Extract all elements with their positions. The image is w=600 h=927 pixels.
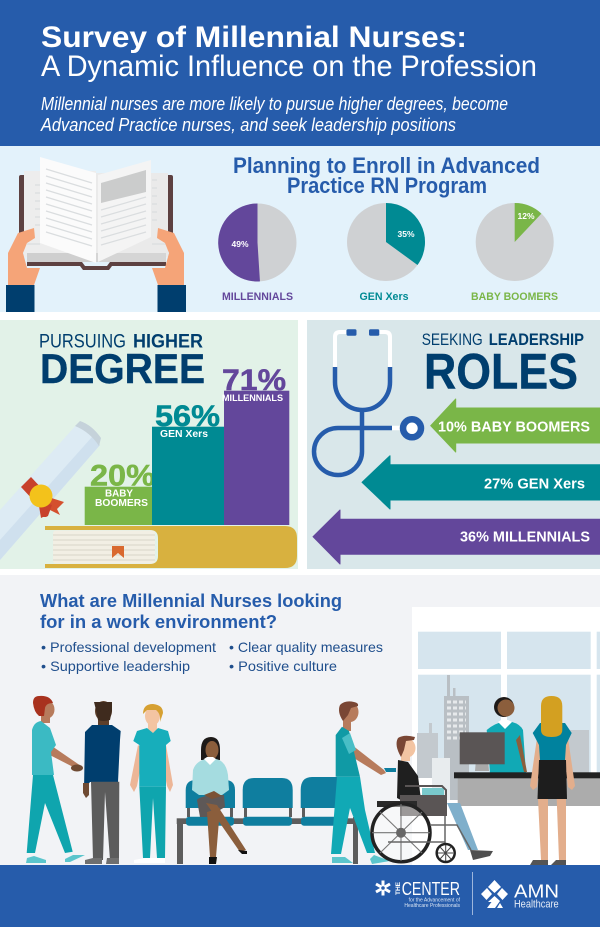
bullet list bbox=[41, 639, 383, 674]
pie chart: millennials 49% bbox=[218, 203, 296, 303]
figure: nurse shaking hands bbox=[26, 696, 85, 863]
subtitle bbox=[40, 94, 508, 135]
icon: computer monitor bbox=[454, 732, 600, 778]
bar chart: higher degree bbox=[85, 364, 289, 525]
figure: receptionist bbox=[487, 697, 527, 773]
heading: planning to enroll bbox=[233, 153, 540, 198]
bar: baby boomers 20%: BOOMERS bbox=[95, 498, 148, 509]
panel: advanced practice enrollment bbox=[0, 146, 600, 312]
bullet list: • Professional development bbox=[41, 639, 216, 655]
bullet list: • Supportive leadership bbox=[41, 658, 190, 674]
figure: patient in wheelchair bbox=[372, 736, 493, 862]
panel: seeking leadership roles bbox=[307, 320, 600, 569]
right hand bbox=[152, 228, 184, 285]
logo: amn healthcare: AMN bbox=[514, 881, 559, 901]
left hand bbox=[8, 228, 40, 285]
left cuff bbox=[6, 285, 34, 312]
icon: closed book bbox=[45, 526, 297, 568]
heading: work environment question: for in a work environment? bbox=[40, 612, 277, 632]
title bbox=[41, 21, 537, 83]
logo: the center: for the Advancement of bbox=[409, 898, 461, 904]
heading: planning to enroll: Planning to Enroll in Advanced bbox=[233, 153, 540, 178]
front desk bbox=[458, 778, 600, 806]
heading: work environment question bbox=[40, 591, 342, 632]
bar: millennials 71%: MILLENNIALS bbox=[222, 393, 283, 404]
illustration: reception room with windows bbox=[412, 607, 600, 865]
heading: seeking leadership roles: SEEKING bbox=[422, 331, 483, 349]
panel: work environment bbox=[0, 575, 600, 865]
heading: work environment question: What are Millennial Nurses looking bbox=[40, 591, 342, 611]
subtitle: Millennial nurses are more likely to pursue higher degrees, become bbox=[41, 94, 508, 114]
arrow: millennials 36%: 36% MILLENNIALS bbox=[460, 530, 590, 546]
arrow: baby boomers 10% bbox=[431, 399, 600, 452]
heading: pursuing higher degree: PURSUING bbox=[39, 332, 126, 352]
bar: baby boomers 20%: BABY bbox=[105, 489, 133, 500]
header banner bbox=[0, 0, 600, 146]
subtitle: Advanced Practice nurses, and seek leadership positions bbox=[40, 115, 456, 135]
arrow: gen xers 27%: 27% GEN Xers bbox=[484, 477, 585, 493]
logo: the center: CENTER bbox=[402, 879, 460, 899]
pie chart: gen xers 35%: 35% bbox=[397, 229, 415, 239]
pie chart: baby boomers 12%: 12% bbox=[517, 211, 535, 221]
heading: pursuing higher degree: DEGREE bbox=[40, 345, 205, 392]
bar: millennials 71% bbox=[222, 364, 289, 525]
figure: blonde nurse bbox=[130, 704, 173, 863]
icon: open book held by hands bbox=[6, 157, 186, 312]
footer banner bbox=[0, 865, 600, 927]
arrow: gen xers 27% bbox=[362, 456, 600, 509]
logo: the center: THE bbox=[395, 881, 402, 895]
arrow: baby boomers 10%: 10% BABY BOOMERS bbox=[438, 420, 590, 436]
row of waiting chairs bbox=[177, 777, 358, 864]
logo: amn healthcare: Healthcare bbox=[514, 898, 559, 910]
bar: baby boomers 20%: 20% bbox=[90, 460, 155, 493]
pie chart: gen xers 35% bbox=[347, 203, 425, 303]
bar: gen xers 56% bbox=[152, 400, 224, 525]
bar: gen xers 56%: 56% bbox=[155, 400, 220, 433]
right cuff bbox=[158, 285, 186, 312]
logo: amn healthcare bbox=[481, 880, 559, 910]
figure: seated woman bbox=[192, 737, 247, 864]
figure: woman at desk bbox=[530, 696, 575, 865]
icon: diploma scroll bbox=[0, 421, 101, 560]
icon: stethoscope bbox=[314, 329, 421, 475]
heading: planning to enroll: Practice RN Program bbox=[287, 173, 487, 198]
figure: nurse pushing wheelchair bbox=[331, 701, 396, 864]
figure: man in navy jacket bbox=[83, 701, 121, 864]
bar: baby boomers 20% bbox=[85, 460, 156, 525]
heading: seeking leadership roles: LEADERSHIP bbox=[489, 331, 584, 349]
bullet list: • Positive culture bbox=[229, 658, 337, 674]
title: A Dynamic Influence on the Profession bbox=[41, 50, 537, 83]
pie chart: baby boomers 12% bbox=[471, 203, 558, 303]
logo: the center bbox=[376, 879, 461, 909]
heading: pursuing higher degree: HIGHER bbox=[133, 332, 203, 352]
panel: pursuing higher degree bbox=[0, 320, 298, 569]
title: Survey of Millennial Nurses: bbox=[41, 21, 467, 54]
logo: the center: Healthcare Professionals bbox=[404, 903, 460, 909]
bar: millennials 71%: 71% bbox=[222, 364, 286, 397]
bullet list: • Clear quality measures bbox=[229, 639, 383, 655]
pie chart: millennials 49%: 49% bbox=[231, 239, 249, 249]
pie chart: millennials 49%: MILLENNIALS bbox=[222, 291, 293, 303]
arrow: millennials 36% bbox=[313, 510, 600, 564]
pie chart: gen xers 35%: GEN Xers bbox=[360, 291, 408, 303]
heading: seeking leadership roles: ROLES bbox=[424, 343, 578, 399]
pie chart: baby boomers 12%: BABY BOOMERS bbox=[471, 291, 558, 303]
bar: gen xers 56%: GEN Xers bbox=[160, 428, 208, 440]
